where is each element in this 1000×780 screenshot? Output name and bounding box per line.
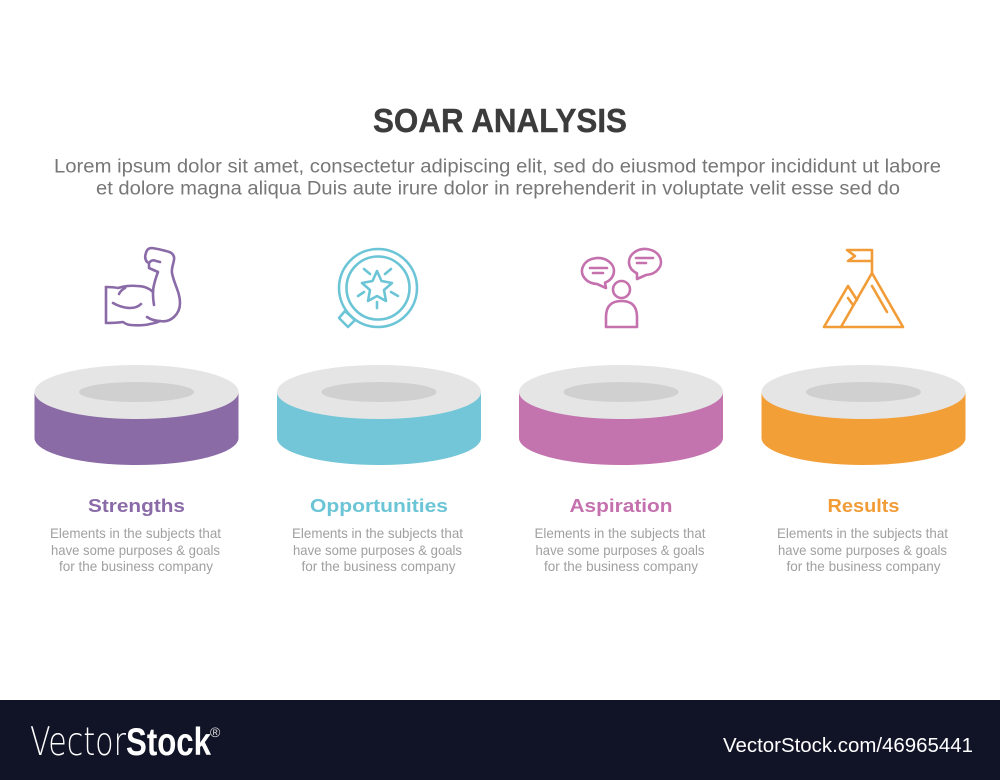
text block: aspiration: Elements in the subjects that <box>534 525 706 541</box>
text block: results: Elements in the subjects that <box>777 525 948 541</box>
cylinder: opportunities <box>277 365 481 465</box>
text block: opportunities: for the business company <box>302 558 456 574</box>
text block: strengths: for the business company <box>59 558 213 574</box>
cylinder: results <box>762 365 966 465</box>
subtitle text: et dolore magna aliqua Duis aute irure dolor in reprehenderit in voluptate velit esse sed do <box>96 178 900 200</box>
footer logo: Vector <box>30 720 126 765</box>
cylinder: aspiration <box>519 365 723 465</box>
icon: person with speech bubbles <box>582 249 661 327</box>
footer logo: Stock <box>126 721 211 764</box>
text block: opportunities: have some purposes & goals <box>293 542 462 558</box>
text block: opportunities <box>292 495 463 574</box>
text block: results: Results <box>828 495 900 516</box>
icon: star in magnifier <box>339 249 417 327</box>
text block: strengths <box>50 495 221 574</box>
text block: aspiration: Aspiration <box>570 495 672 516</box>
icon: flexed arm <box>106 248 180 325</box>
cylinder: strengths <box>34 365 238 465</box>
text block: strengths: have some purposes & goals <box>51 542 220 558</box>
text block: results: have some purposes & goals <box>778 542 947 558</box>
text block: results <box>777 495 948 574</box>
footer logo <box>30 720 221 765</box>
text block: opportunities: Opportunities <box>310 495 448 516</box>
text block: strengths: Elements in the subjects that <box>50 525 221 541</box>
subtitle text <box>54 156 941 200</box>
text block: opportunities: Elements in the subjects that <box>292 525 463 541</box>
title: SOAR ANALYSIS <box>373 102 627 139</box>
text block: aspiration: have some purposes & goals <box>536 542 704 558</box>
text block: aspiration: for the business company <box>544 558 698 574</box>
footer image id: VectorStock.com/46965441 <box>723 735 973 757</box>
icon: mountain with flag <box>824 250 903 327</box>
subtitle text: Lorem ipsum dolor sit amet, consectetur adipiscing elit, sed do eiusmod tempor incididunt ut labore <box>54 156 941 178</box>
footer bar <box>0 700 1000 780</box>
footer logo: ® <box>210 724 221 740</box>
text block: aspiration <box>534 495 706 574</box>
text block: results: for the business company <box>786 558 940 574</box>
text block: strengths: Strengths <box>88 495 185 516</box>
